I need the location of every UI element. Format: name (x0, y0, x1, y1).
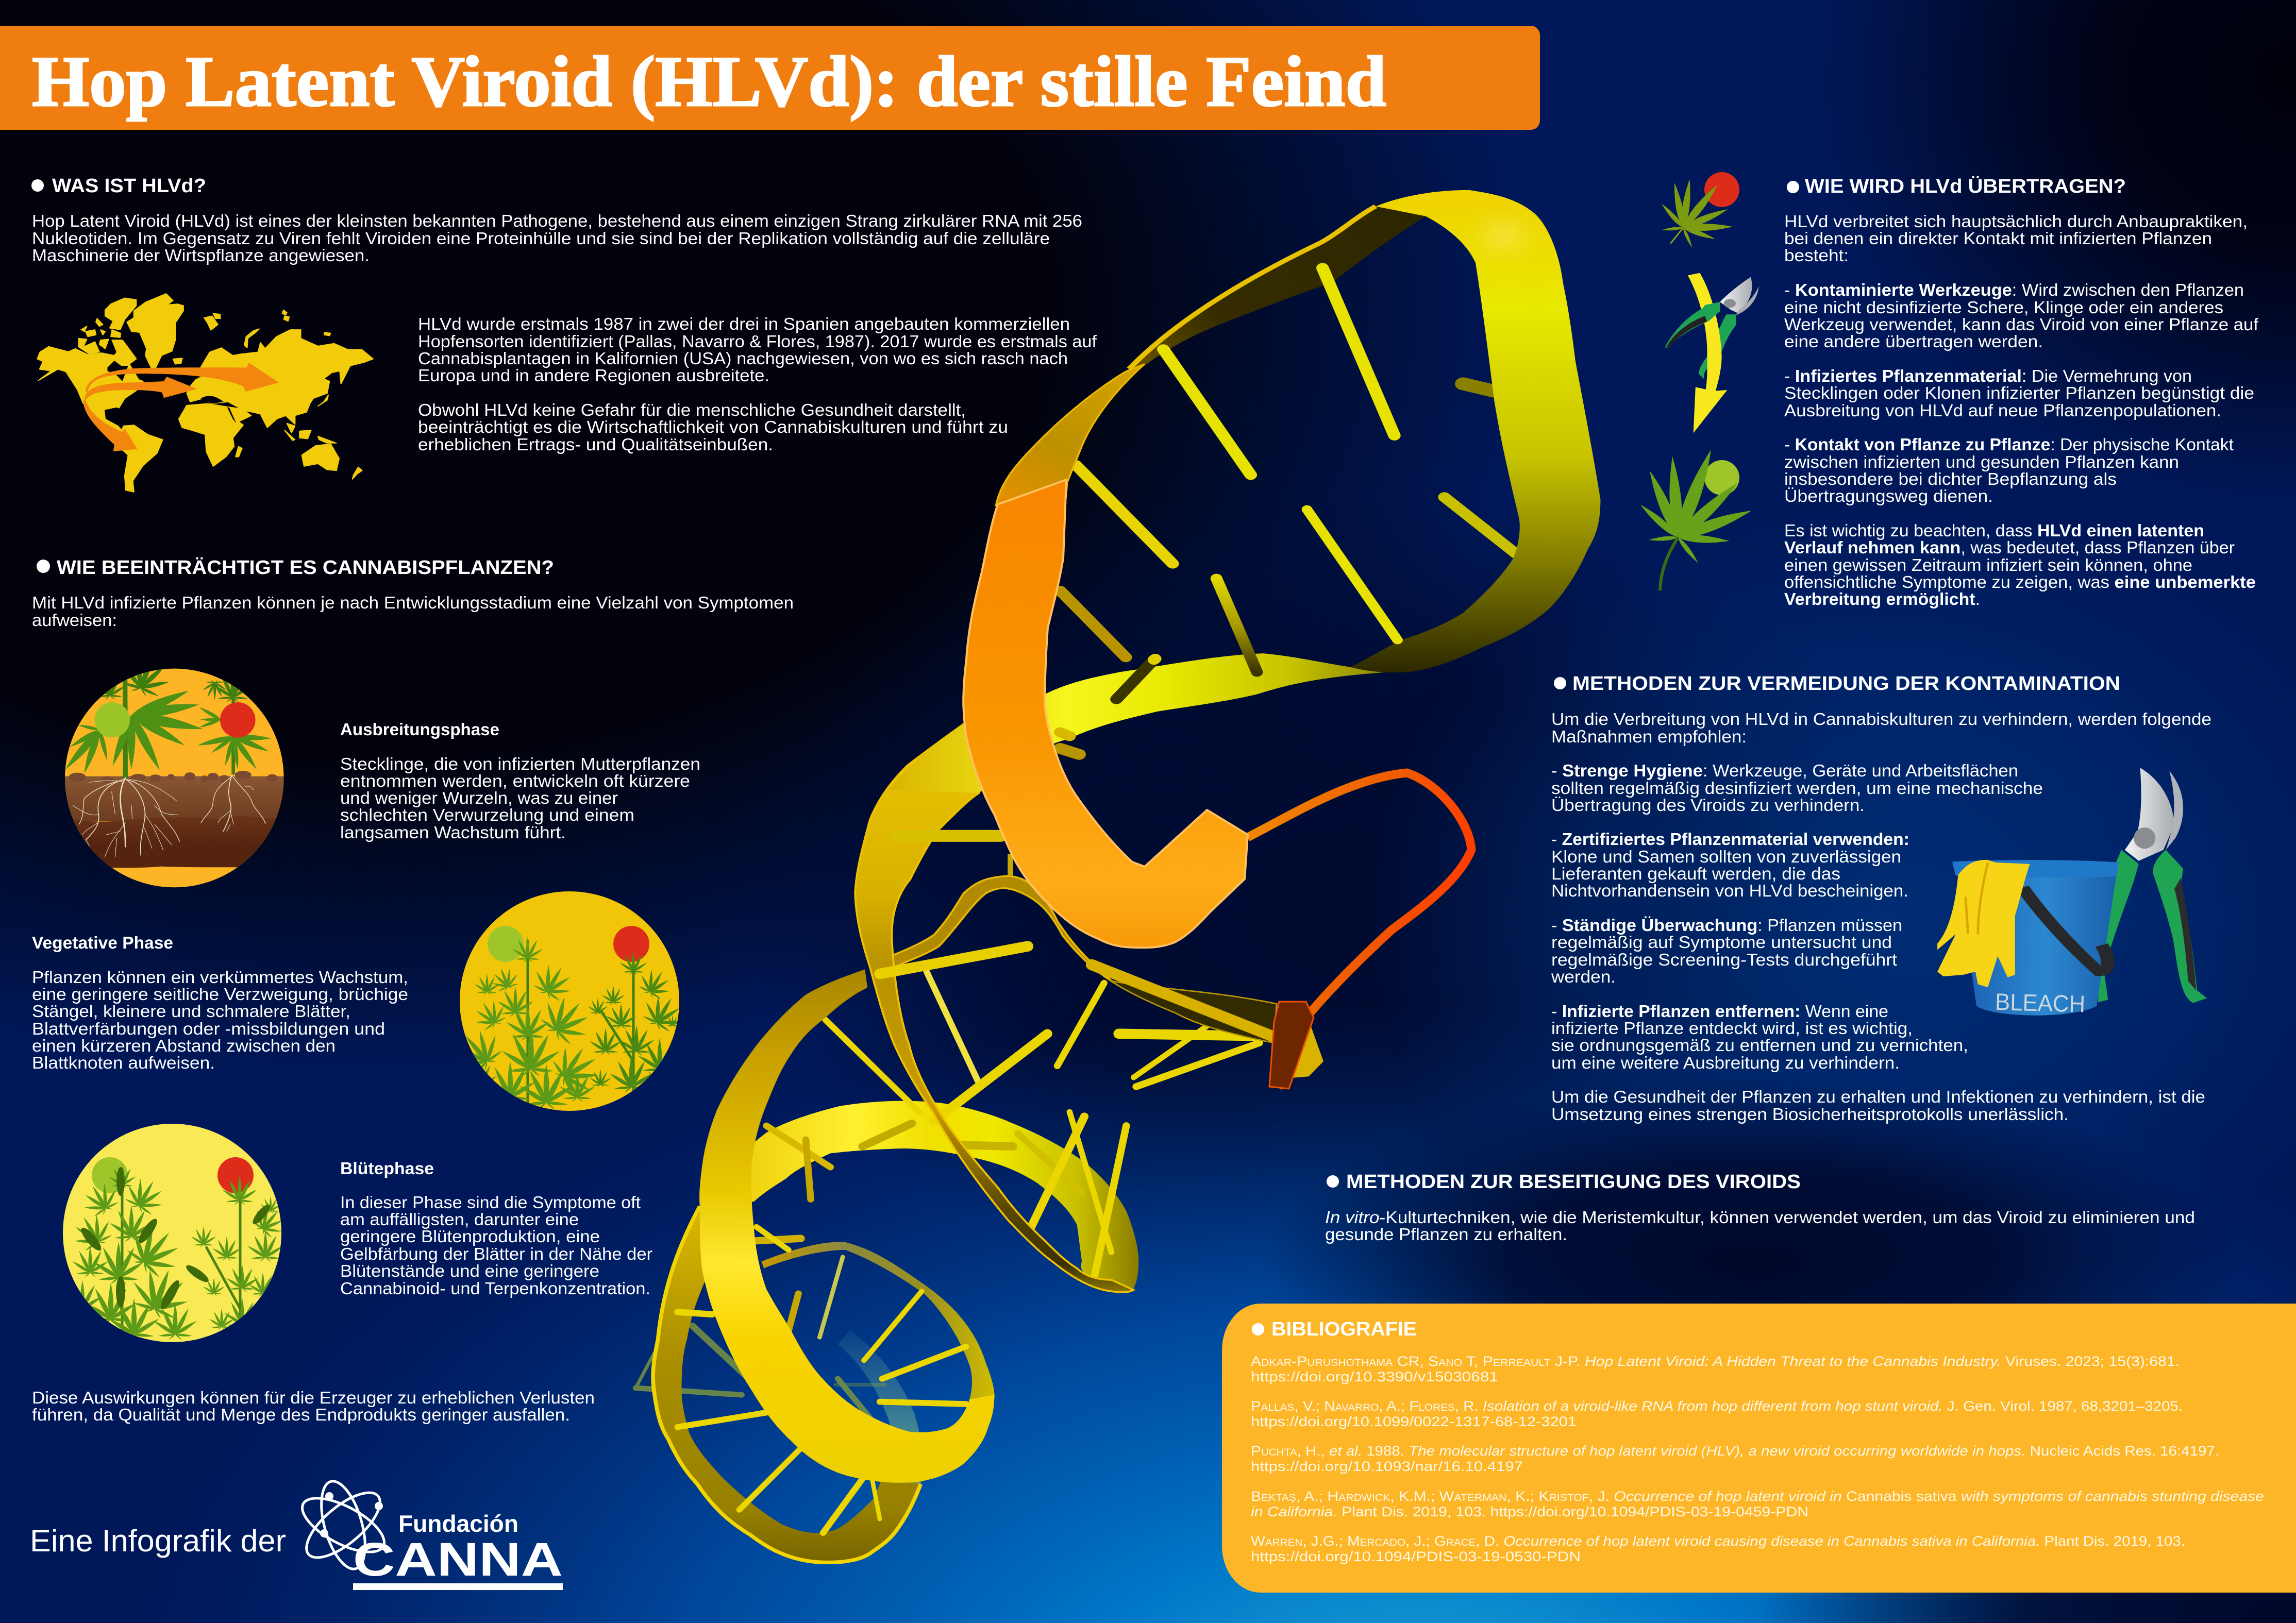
text: flowering phase: Blütenstände und eine geringere (340, 1261, 599, 1280)
text: transmission (1784, 212, 2259, 608)
text: transmission: Verlauf nehmen kann , was bedeutet, dass Pflanzen über (1784, 538, 2235, 557)
text: transmission: - Kontakt von Pflanze zu Pflanze : Der physische Kontakt (1784, 435, 2234, 454)
text: flowering phase: In dieser Phase sind die Symptome oft (340, 1193, 641, 1212)
text: vegetative phase (32, 933, 408, 1072)
heading: bibliography: BIBLIOGRAFIE (1271, 1318, 1417, 1340)
text: prevention: Übertragung des Viroids zu verhindern. (1551, 796, 1865, 815)
text: vegetative phase: Vegetative Phase (32, 933, 173, 952)
atom icon (294, 1476, 392, 1574)
pale back bar (819, 1257, 843, 1338)
references list: https://doi.org/10.1099/0022-1317-68-12-3201 (1251, 1414, 1577, 1429)
text: symptoms intro (32, 593, 794, 630)
gold rim of top arc (1129, 206, 1376, 369)
lower helix (635, 724, 1323, 1562)
DNA / RNA ribbon illustration (635, 190, 1600, 1562)
text: history: beeinträchtigt es die Wirtschaftlichkeit von Cannabiskulturen und führt zu (418, 417, 1008, 436)
text: history: Obwohl HLVd keine Gefahr für die menschliche Gesundheit darstellt, (418, 400, 966, 419)
heading: Cannabispflanzen: WIE BEEINTRÄCHTIGT ES CANNABISPFLANZEN? (57, 556, 554, 579)
text: history: Cannabisplantagen in Kalifornien (USA) nachgewiesen, von wo es sich rasch nach (418, 349, 1068, 368)
text: prevention: - Strenge Hygiene : Werkzeuge, Geräte und Arbeitsflächen (1551, 761, 2018, 780)
text: vegetative phase: eine geringere seitliche Verzweigung, brüchige (32, 985, 408, 1004)
icon: world map with spread arrows (37, 294, 373, 492)
references list: Pallas , V.; Navarro , A.; Flores , R. Isolation of a viroid-like RNA from hop different from hop stunt viroid. J. Gen. Virol. 1987, 68,3201–3205. (1251, 1398, 2183, 1414)
logo: Fundación CANNA (294, 1476, 563, 1590)
panel: bibliography (1222, 1304, 2296, 1593)
icon: bleach bucket, gloves and pruners: BLEACH (1995, 988, 2086, 1018)
text: transmission: Verbreitung ermöglicht . (1784, 589, 1980, 608)
text: propagation phase: und weniger Wurzeln, was zu einer (340, 788, 618, 807)
text: prevention: sie ordnungsgemäß zu entfernen und zu vernichten, (1551, 1036, 1968, 1055)
base pair bars, lower helix (678, 972, 1260, 1533)
references list: Warren , J.G.; Mercado , J.; Grace, D. Occurrence of hop latent viroid causing disease in Cannabis sativa in California. Plant Dis. 2019, 103. (1251, 1533, 2185, 1549)
back-left lower loop (653, 1206, 920, 1562)
ribbon glint (1484, 221, 1523, 251)
icon: infected leaf (1660, 172, 1739, 248)
text: prevention: infizierte Pflanze entdeckt wird, ist es wichtig, (1551, 1019, 1913, 1038)
references list: https://doi.org/10.1094/PDIS-03-19-0530-PDN (1251, 1549, 1581, 1564)
text: prevention: Umsetzung eines strengen Biosicherheitsprotokolls unerlässlich. (1551, 1105, 2069, 1124)
text: prevention: Klone und Samen sollten von zuverlässigen (1551, 847, 1901, 866)
text: transmission: Stecklingen oder Klonen infizierter Pflanzen begünstigt die (1784, 383, 2254, 402)
translucent back ribbon (838, 1330, 923, 1484)
references list: https://doi.org/10.1093/nar/16.10.4197 (1251, 1459, 1523, 1474)
dark-red knot block (1269, 1002, 1314, 1089)
text: transmission: Übertragungsweg dienen. (1784, 486, 1993, 505)
text: prevention: werden. (1551, 967, 1616, 986)
title: Hop Latent Viroid (HLVd): der stille Feind (32, 42, 1386, 122)
upper helix (889, 190, 1600, 793)
text: vegetative phase: Stängel, kleinere und schmalere Blätter, (32, 1002, 350, 1021)
text: prevention (1551, 709, 2211, 1124)
thin back of lower ring (761, 1242, 995, 1399)
icon: bleach bucket, gloves and pruners (1937, 768, 2207, 1018)
text: prevention: regelmäßig auf Symptome untersucht und (1551, 933, 1892, 952)
text: intro (32, 211, 1082, 265)
references list (1251, 1354, 2264, 1564)
text: prevention: regelmäßige Screening-Tests durchgeführt (1551, 950, 1897, 969)
illustration: propagation phase circle (65, 669, 284, 887)
arch strand (892, 876, 1136, 994)
text: intro: Hop Latent Viroid (HLVd) ist eines der kleinsten bekannten Pathogene, bestehend aus einem einzigen Strang zirkulärer RNA mit 256 (32, 211, 1082, 230)
upper base pair bars (1060, 268, 1398, 754)
heading: transmission: WIE WIRD HLVd ÜBERTRAGEN? (1805, 175, 2126, 197)
text: losses: Diese Auswirkungen können für die Erzeuger zu erheblichen Verlusten (32, 1388, 595, 1407)
bucket handle (2022, 887, 2108, 972)
text: vegetative phase: einen kürzeren Abstand zwischen den (32, 1036, 336, 1055)
behind-right bars (1445, 384, 1516, 554)
pruner handles (2098, 850, 2139, 1002)
references list: https://doi.org/10.3390/v15030681 (1251, 1369, 1498, 1384)
heading: elimination: METHODEN ZUR BESEITIGUNG DES VIROIDS (1346, 1171, 1801, 1193)
text: transmission: Es ist wichtig zu beachten, dass HLVd einen latenten (1784, 521, 2204, 540)
text: propagation phase: schlechten Verwurzelung und einem (340, 805, 634, 824)
section: Methoden zur Vermeidung (1551, 673, 2211, 1124)
text: losses (32, 1388, 595, 1424)
text: intro: Maschinerie der Wirtspflanze angewiesen. (32, 246, 370, 265)
right side of loop (1351, 190, 1600, 672)
text: flowering phase: Cannabinoid- und Terpenkonzentration. (340, 1279, 650, 1298)
logo: Fundación CANNA: CANNA (353, 1533, 563, 1586)
text: prevention: Um die Verbreitung von HLVd in Cannabiskulturen zu verhindern, werden folgende (1551, 709, 2211, 729)
text: propagation phase: Stecklinge, die von infizierten Mutterpflanzen (340, 754, 700, 773)
text: history: erheblichen Ertrags- und Qualitätseinbußen. (418, 435, 773, 454)
illustration: flowering phase circle (62, 1124, 291, 1342)
gold arc into orange (996, 364, 1145, 505)
text: transmission: HLVd verbreitet sich hauptsächlich durch Anbaupraktiken, (1784, 212, 2248, 231)
text: prevention: - Ständige Überwachung : Pflanzen müssen (1551, 916, 1902, 935)
logo: Fundación CANNA: Fundación (398, 1510, 518, 1537)
text: transmission: - Infiziertes Pflanzenmaterial : Die Vermehrung von (1784, 366, 2192, 385)
text: transmission: zwischen infizierten und gesunden Pflanzen kann (1784, 452, 2179, 471)
outer rim of lower loop (653, 1206, 920, 1562)
text: transmission: Ausbreitung von HLVd auf neue Pflanzenpopulationen. (1784, 401, 2221, 420)
gloves (1937, 860, 2030, 987)
text: transmission: besteht: (1784, 246, 1849, 265)
text: flowering phase: geringere Blütenproduktion, eine (340, 1227, 600, 1246)
references list: in California. Plant Dis. 2019, 103. https://doi.org/10.1094/PDIS-03-19-0459-PDN (1251, 1504, 1808, 1519)
text: prevention: - Infizierte Pflanzen entfernen: Wenn eine (1551, 1002, 1888, 1021)
text: propagation phase: langsamen Wachstum führt. (340, 823, 566, 842)
text: flowering phase (340, 1159, 652, 1298)
text: prevention: - Zertifiziertes Pflanzenmaterial verwenden: (1551, 830, 1909, 849)
icon: pruner with arrow (1665, 273, 1759, 433)
text: prevention: Nichtvorhandensein von HLVd bescheinigen. (1551, 881, 1908, 900)
marker: infected (220, 702, 256, 738)
text: transmission: offensichtliche Symptome zu zeigen, was eine unbemerkte (1784, 572, 2256, 591)
text: vegetative phase: Blattknoten aufweisen. (32, 1053, 215, 1072)
text: prevention: Um die Gesundheit der Pflanzen zu erhalten und Infektionen zu verhindern, ist die (1551, 1087, 2205, 1106)
section: Was ist HLVd (31, 175, 1097, 492)
references list: Puchta , H., et al. 1988. The molecular structure of hop latent viroid (HLV), a new viroid occurring worldwide in hops. Nucleic Acids Res. 16:4197. (1251, 1443, 2219, 1459)
text: transmission: Werkzeug verwendet, kann das Viroid von einer Pflanze auf (1784, 315, 2259, 334)
text: elimination: gesunde Pflanzen zu erhalten. (1325, 1225, 1567, 1244)
dim back bars (635, 1326, 885, 1418)
main orange ribbon (963, 480, 1248, 948)
text: prevention: Maßnahmen empfohlen: (1551, 727, 1747, 746)
yellow middle arc (700, 1101, 1138, 1291)
text: symptoms intro: aufweisen: (32, 611, 117, 630)
bars behind orange (897, 829, 1000, 842)
text: history: Europa und in andere Regionen ausbreitete. (418, 366, 769, 385)
references list: Bektaş , A.; Hardwick , K.M.; Waterman , K.; Kristof , J. Occurrence of hop latent viroid in Cannabis sativa with symptoms of cannabis stunting disease (1251, 1489, 2264, 1504)
references list: Adkar-Purushothama CR, Sano T, Perreault J-P. Hop Latent Viroid: A Hidden Threat to the Cannabis Industry. Viruses. 2023; 15(3):681. (1251, 1354, 2180, 1369)
bar across strand (880, 946, 1028, 974)
heading: Was ist HLVd: WAS IST HLVd? (52, 175, 206, 197)
text: flowering phase: Blütephase (340, 1159, 434, 1178)
marker: healthy (94, 702, 130, 738)
dark band toward knot (1112, 981, 1277, 1043)
icon: healthy leaf (1638, 447, 1754, 590)
section: Wie wird HLVd übertragen (1638, 172, 2259, 608)
text: propagation phase: entnommen werden, entwickeln oft kürzere (340, 771, 690, 790)
section: Wie beeinträchtigt es Cannabispflanzen (32, 556, 794, 1424)
text: vegetative phase: Blattverfärbungen oder -missbildungen und (32, 1019, 385, 1038)
text: flowering phase: Gelbfärbung der Blätter in der Nähe der (340, 1244, 652, 1263)
pruner blades (2125, 768, 2174, 861)
dark inner face of top arc (1129, 206, 1426, 369)
text: transmission: einen gewissen Zeitraum infiziert sein können, ohne (1784, 555, 2192, 574)
text: elimination (1325, 1208, 2195, 1244)
text: history: HLVd wurde erstmals 1987 in zwei der drei in Spanien angebauten kommerziellen (418, 314, 1070, 333)
wide front gold ribbon (699, 969, 994, 1483)
text: losses: führen, da Qualität und Menge des Endprodukts geringer ausfallen. (32, 1405, 570, 1424)
text: propagation phase: Ausbreitungsphase (340, 720, 499, 739)
bucket (1958, 875, 2117, 1016)
lower band of top loop (889, 653, 1388, 793)
text: intro: Nukleotiden. Im Gegensatz zu Viren fehlt Viroiden eine Proteinhülle und sie sind bei der Replikation vollständig auf die zelluläre (32, 229, 1050, 248)
title bar (0, 26, 1540, 130)
heading: prevention: METHODEN ZUR VERMEIDUNG DER KONTAMINATION (1572, 673, 2120, 695)
text: prevention: Lieferanten gekauft werden, die das (1551, 864, 1840, 883)
illustration: vegetative phase circle (460, 891, 679, 1111)
thick bar to knot (1092, 965, 1274, 1037)
red-orange tail (1248, 773, 1471, 1087)
text: transmission: insbesondere bei dichter Bepflanzung als (1784, 469, 2117, 488)
knot tip (1286, 1027, 1323, 1078)
text: propagation phase (340, 720, 700, 842)
text: history: Hopfensorten identifiziert (Pallas, Navarro & Flores, 1987). 2017 wurde es erstmals auf (418, 332, 1097, 351)
text: flowering phase: am auffälligsten, darunter eine (340, 1210, 579, 1229)
text: transmission: - Kontaminierte Werkzeuge : Wird zwischen den Pflanzen (1784, 280, 2244, 299)
text: vegetative phase: Pflanzen können ein verkümmertes Wachstum, (32, 968, 408, 987)
text: symptoms intro: Mit HLVd infizierte Pflanzen können je nach Entwicklungsstadium eine Vielzahl von Symptomen (32, 593, 794, 612)
text: prevention: um eine weitere Ausbreitung zu verhindern. (1551, 1053, 1900, 1072)
credit line: Eine Infografik der (30, 1524, 286, 1558)
text: transmission: eine andere übertragen werden. (1784, 332, 2043, 351)
text: prevention: sollten regelmäßig desinfiziert werden, um eine mechanische (1551, 779, 2043, 798)
text: elimination: In vitro-Kulturtechniken, wie die Meristemkultur, können verwendet werden, um das Viroid zu eliminieren und (1325, 1208, 2195, 1227)
text: history (418, 314, 1097, 454)
text: transmission: bei denen ein direkter Kontakt mit infizierten Pflanzen (1784, 229, 2212, 248)
narrow twisting strand (855, 724, 1134, 1292)
section: Methoden zur Beseitigung (1325, 1171, 2195, 1244)
text: transmission: eine nicht desinfizierte Schere, Klinge oder ein anderes (1784, 298, 2223, 317)
